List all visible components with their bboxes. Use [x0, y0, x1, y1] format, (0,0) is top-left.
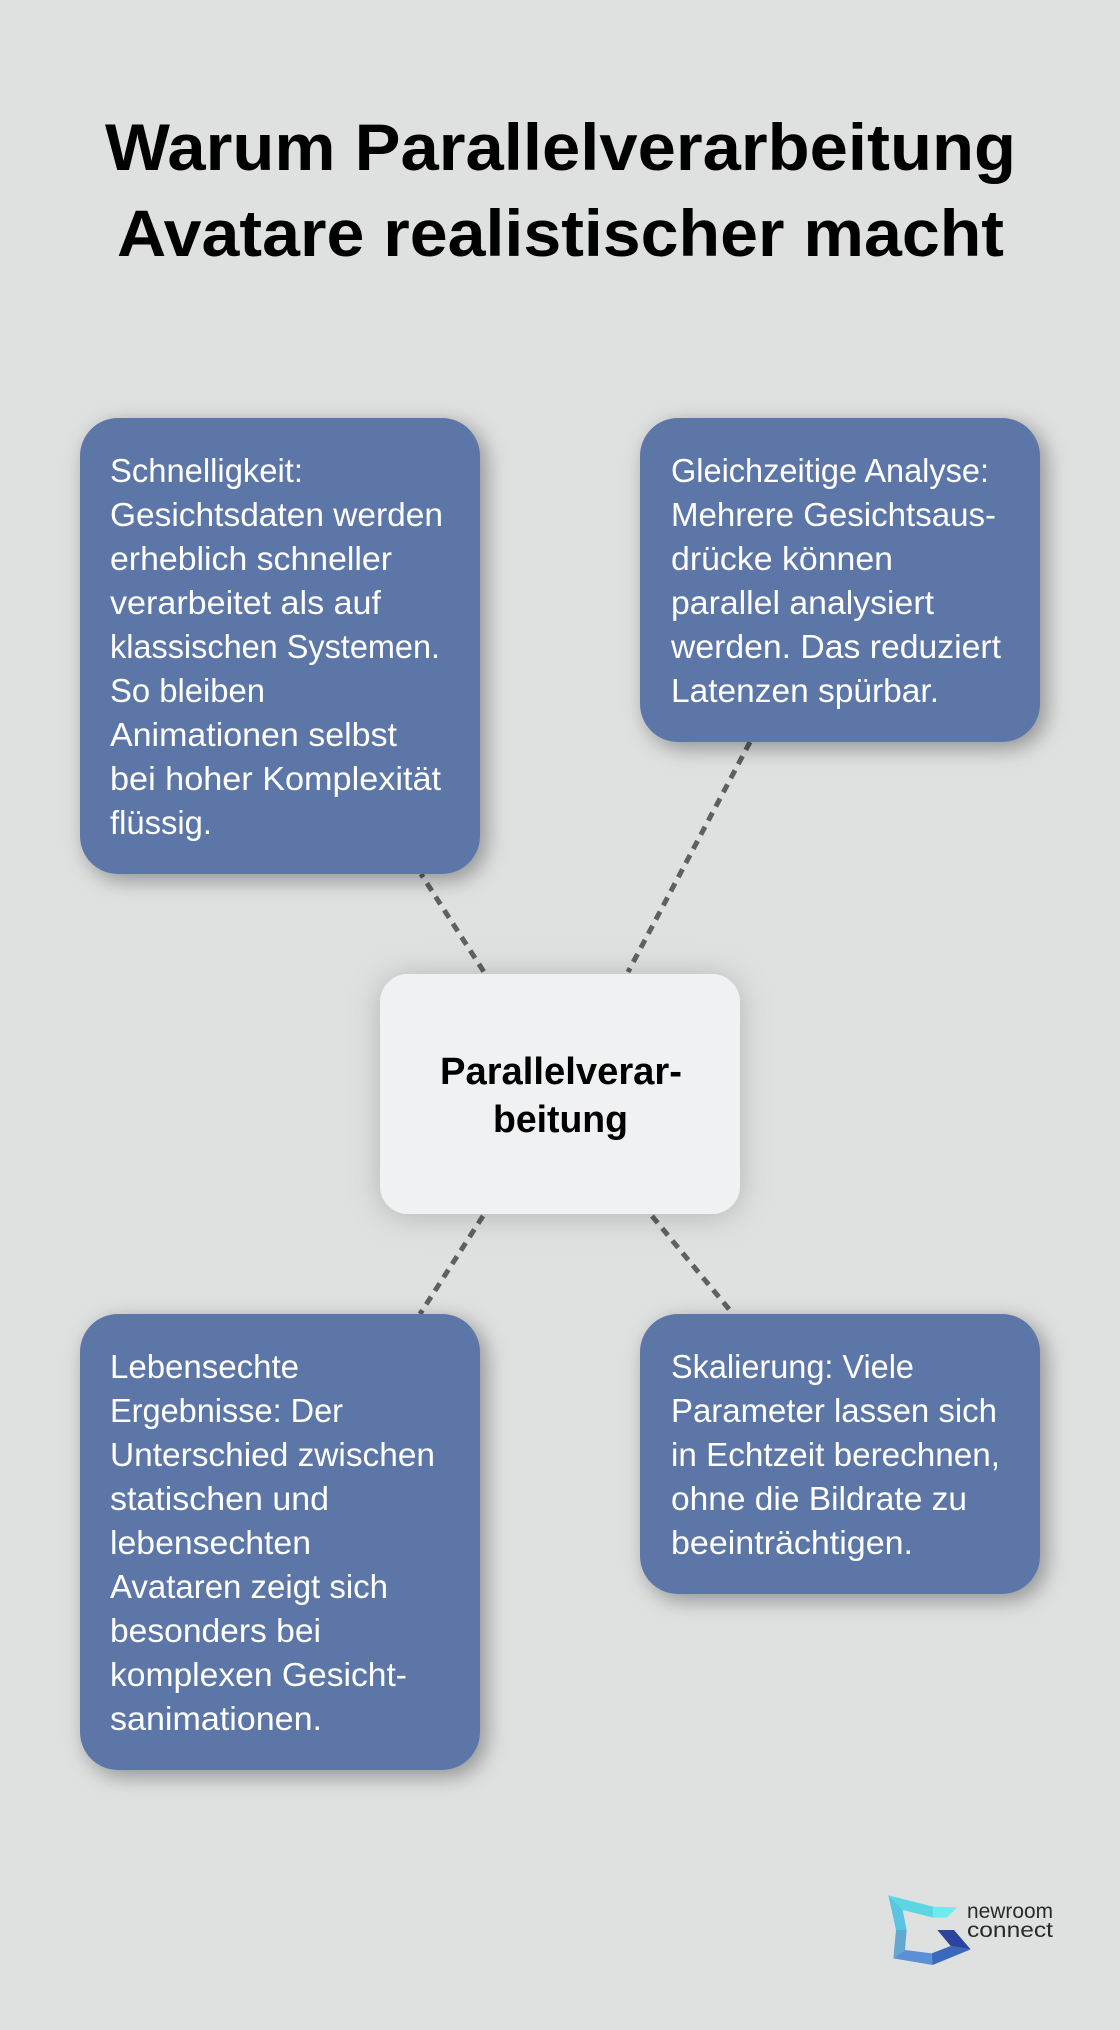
- panel: Skalierung: Skalierung: Viele: [671, 1348, 914, 1385]
- title: Warum Parallelverarbeitung: [105, 110, 1016, 184]
- panel: Schnelligkeit: Animationen selbst: [110, 716, 397, 753]
- panel: Schnelligkeit: [80, 418, 480, 874]
- panel: Skalierung: [640, 1314, 1040, 1594]
- logo wordmark: [967, 1900, 1053, 1942]
- panel: center node: beitung: [493, 1099, 628, 1141]
- panel: Schnelligkeit: flüssig.: [110, 804, 212, 841]
- panel: Lebensechte Ergebnisse: sanimationen.: [110, 1700, 322, 1737]
- panel: Gleichzeitige Analyse: werden. Das reduziert: [670, 628, 1001, 665]
- panel: Gleichzeitige Analyse: Latenzen spürbar.: [671, 672, 939, 709]
- title: Avatare realistischer macht: [117, 196, 1004, 270]
- logo wordmark: connect: [967, 1919, 1053, 1942]
- panel: Lebensechte Ergebnisse: lebensechten: [110, 1524, 311, 1561]
- panel: Skalierung: Parameter lassen sich: [671, 1392, 997, 1429]
- title: [105, 110, 1016, 270]
- panel: Skalierung: ohne die Bildrate zu: [671, 1480, 967, 1517]
- panel: Schnelligkeit: klassischen Systemen.: [110, 628, 440, 665]
- panel: center node: [380, 974, 740, 1214]
- panel: Schnelligkeit: Gesichtsdaten werden: [110, 496, 443, 533]
- icon: logo mark: [888, 1895, 971, 1965]
- panel: Schnelligkeit: erheblich schneller: [110, 540, 392, 577]
- panel: Lebensechte Ergebnisse: Avataren zeigt sich: [110, 1568, 388, 1605]
- panel: Gleichzeitige Analyse: parallel analysiert: [671, 584, 934, 621]
- panel: Schnelligkeit: Schnelligkeit:: [110, 452, 303, 489]
- panel: Schnelligkeit: bei hoher Komplexität: [110, 760, 441, 797]
- panel: Skalierung: in Echtzeit berechnen,: [671, 1436, 1000, 1473]
- panel: Skalierung: beeinträchtigen.: [671, 1524, 913, 1561]
- panel: Schnelligkeit: verarbeitet als auf: [110, 584, 382, 621]
- panel: Lebensechte Ergebnisse: komplexen Gesicht-: [110, 1656, 407, 1693]
- logo: newroom connect: [888, 1895, 1053, 1965]
- connectors: [420, 742, 750, 1314]
- panel: Lebensechte Ergebnisse: besonders bei: [110, 1612, 321, 1649]
- panel: Lebensechte Ergebnisse: Unterschied zwischen: [110, 1436, 435, 1473]
- panel: Lebensechte Ergebnisse: [80, 1314, 480, 1770]
- panel: Lebensechte Ergebnisse: Ergebnisse: Der: [110, 1392, 343, 1429]
- panel: Lebensechte Ergebnisse: Lebensechte: [110, 1348, 299, 1385]
- panel: center node: Parallelverar-: [440, 1051, 682, 1093]
- panel: Gleichzeitige Analyse: [640, 418, 1040, 742]
- panel: Schnelligkeit: So bleiben: [110, 672, 265, 709]
- logo wordmark: newroom: [967, 1900, 1053, 1923]
- panel: Gleichzeitige Analyse: drücke können: [671, 540, 893, 577]
- panel: Lebensechte Ergebnisse: statischen und: [110, 1480, 329, 1517]
- panel: Gleichzeitige Analyse: Mehrere Gesichtsaus-: [671, 496, 996, 533]
- panel: Gleichzeitige Analyse: Gleichzeitige Analyse:: [671, 452, 989, 489]
